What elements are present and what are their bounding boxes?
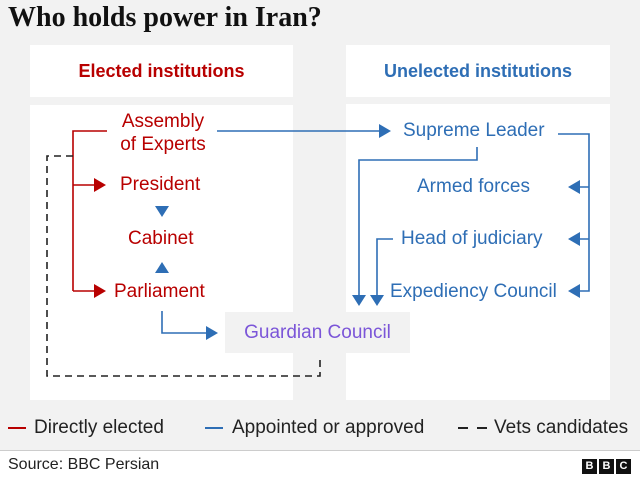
text: expediency council: Expediency Council [390,281,557,302]
text: head of judiciary: Head of judiciary [401,228,543,249]
guardian council box: Guardian Council [244,322,391,343]
text: assembly of experts [120,111,206,155]
BBC logo: C [620,460,627,472]
panel: unelected header [346,45,610,97]
title: Who holds power in Iran? [8,2,322,33]
BBC logo [582,459,631,474]
text: president: President [120,174,200,195]
legend: appointed: Appointed or approved [232,417,424,438]
legend [8,417,628,438]
text: armed forces: Armed forces [417,176,530,197]
text: supreme leader: Supreme Leader [403,120,545,141]
source text: Source: BBC Persian [8,456,159,473]
legend: vets: Vets candidates [494,417,628,438]
legend: directly elected: Directly elected [34,417,164,438]
guardian council box [225,312,410,353]
text: assembly of experts: Assembly [122,111,204,132]
footer [0,450,640,481]
panel: elected header [30,45,293,97]
panel: elected header: Elected institutions [78,61,245,81]
panel: unelected body [346,104,610,400]
text: parliament: Parliament [114,281,205,302]
BBC logo: B [603,460,610,472]
text: cabinet: Cabinet [128,228,194,249]
BBC logo: B [586,460,593,472]
panel: elected body [30,105,293,400]
panel: unelected header: Unelected institutions [384,61,572,81]
text: assembly of experts: of Experts [120,134,206,155]
